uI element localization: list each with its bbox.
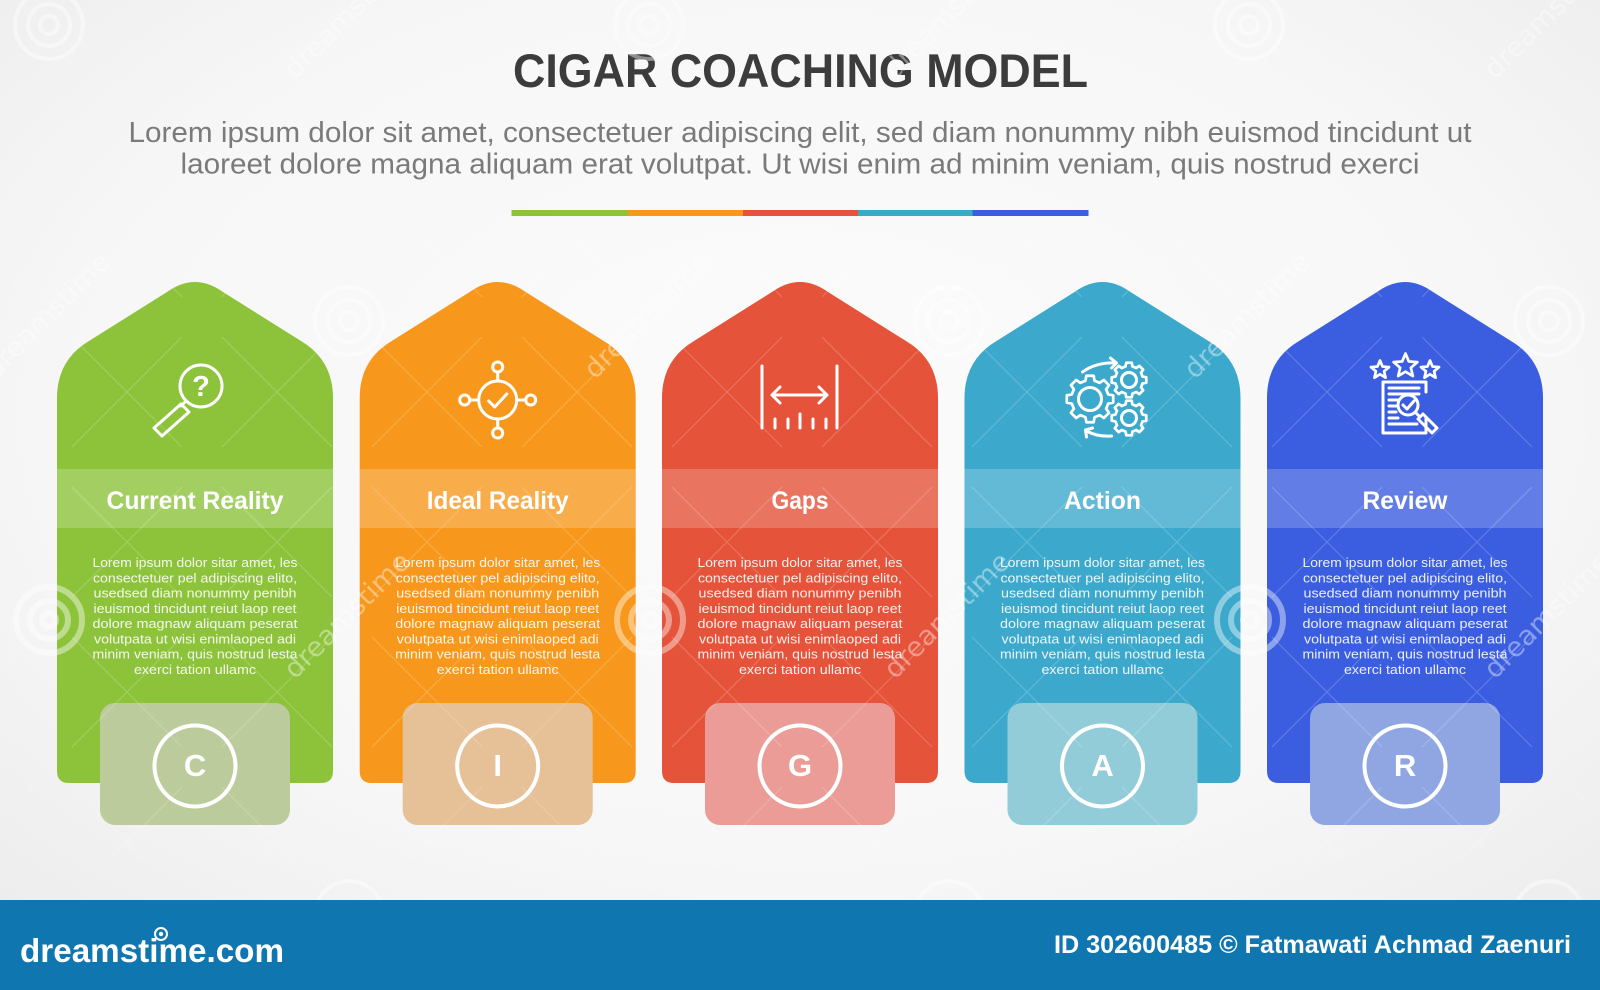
heading: Action (1064, 487, 1141, 515)
body text: ieuismod tincidunt reiut laop reet (94, 601, 297, 616)
body text: usedsed diam nonummy penibh (1304, 586, 1506, 600)
letter tab (1008, 703, 1198, 825)
body text: ieuismod tincidunt reiut laop reet (1001, 601, 1204, 616)
panel: Review (1267, 282, 1543, 825)
body text: dolore magnaw aliquam peserat (92, 616, 298, 631)
watermark: diagonal wordmarks: dreamstime (278, 546, 417, 685)
letter tab (403, 703, 593, 825)
body text (1000, 555, 1206, 677)
subtitle text block: laoreet dolore magna aliquam erat volutpat. Ut wisi enim ad minim veniam, quis nostrud exerci (180, 148, 1420, 180)
body text: usedsed diam nonummy penibh (1001, 586, 1204, 600)
body text: usedsed diam nonummy penibh (396, 586, 599, 600)
heading: Current Reality (106, 487, 284, 515)
body text: consectetuer pel adipiscing elito, (1303, 570, 1507, 585)
panel shape (57, 282, 333, 783)
icon: magnifier with question mark: ? (192, 371, 210, 403)
heading: Ideal Reality (427, 487, 569, 515)
footer credit: ID 302600485 © Fatmawati Achmad Zaenuri (1054, 931, 1571, 959)
heading band (964, 469, 1240, 528)
icon: three gears with cycle arrows (1067, 358, 1146, 437)
body text: consectetuer pel adipiscing elito, (698, 570, 902, 585)
body text: usedsed diam nonummy penibh (94, 586, 296, 600)
letter badge A (1062, 726, 1143, 806)
body text: dolore magnaw aliquam peserat (1000, 616, 1205, 631)
heading: Review (1362, 487, 1448, 515)
icon: measured gap between two bars (762, 366, 837, 428)
multicolor divider (512, 210, 1088, 216)
letter badge I: I (493, 748, 502, 783)
body text: exerci tation ullamc (739, 662, 862, 677)
body text: minim veniam, quis nostrud lesta (1000, 646, 1206, 662)
heading: Gaps (772, 487, 828, 515)
letter badge R: R (1394, 748, 1416, 783)
body text: volutpata ut wisi enimlaoped adi (1001, 631, 1204, 646)
panel: Gaps (662, 282, 938, 825)
body text: volutpata ut wisi enimlaoped adi (1304, 631, 1506, 646)
watermark: diagonal wordmarks: dreamstime (878, 546, 1017, 685)
icon: magnifier with question mark (154, 365, 222, 436)
footer logo: dreamstime.com (20, 932, 284, 969)
body text: minim veniam, quis nostrud lesta (395, 646, 601, 662)
body text: minim veniam, quis nostrud lesta (698, 646, 903, 662)
subtitle text block: Lorem ipsum dolor sit amet, consectetuer adipiscing elit, sed diam nonummy nibh euismod tincidunt ut (128, 117, 1472, 149)
letter badge R (1364, 726, 1446, 806)
letter badge C (154, 726, 236, 806)
body text: consectetuer pel adipiscing elito, (93, 570, 297, 585)
body text: dolore magnaw aliquam peserat (1302, 616, 1508, 631)
body text: exerci tation ullamc (437, 662, 559, 677)
footer bar (0, 900, 1600, 990)
body text: dolore magnaw aliquam peserat (395, 616, 601, 631)
body text: Lorem ipsum dolor sitar amet, les (1000, 555, 1206, 570)
watermark: diagonal wordmarks: dreamstime (1178, 246, 1317, 385)
body text: Lorem ipsum dolor sitar amet, les (92, 555, 298, 570)
letter badge G (760, 726, 840, 806)
body text: volutpata ut wisi enimlaoped adi (94, 631, 296, 646)
body text (698, 555, 903, 677)
body text: volutpata ut wisi enimlaoped adi (699, 631, 901, 646)
icon: rated document under magnifier (1371, 354, 1439, 433)
panel shape (360, 282, 636, 783)
icon: target with check and four nodes (460, 362, 536, 438)
body text: exerci tation ullamc (134, 662, 257, 677)
body text: exerci tation ullamc (1042, 662, 1164, 677)
body text: minim veniam, quis nostrud lesta (92, 646, 298, 662)
panel shape (964, 282, 1240, 783)
body text: exerci tation ullamc (1344, 662, 1467, 677)
heading band (57, 469, 333, 528)
heading band (662, 469, 938, 528)
body text: volutpata ut wisi enimlaoped adi (397, 631, 599, 646)
watermark: diagonal wordmarks (0, 0, 1600, 685)
panel shape (662, 282, 938, 783)
body text: Lorem ipsum dolor sitar amet, les (697, 555, 903, 570)
watermark: diagonal wordmarks: dreamstime (578, 246, 717, 385)
body text: consectetuer pel adipiscing elito, (1000, 570, 1204, 585)
body text: ieuismod tincidunt reiut laop reet (1304, 601, 1507, 616)
body text: ieuismod tincidunt reiut laop reet (396, 601, 600, 616)
watermark: repeating crossing lines (0, 240, 1600, 860)
body text: dolore magnaw aliquam peserat (697, 616, 903, 631)
subtitle text block (128, 117, 1472, 180)
letter tab (100, 703, 290, 825)
title: CIGAR COACHING MODEL (513, 44, 1088, 97)
panel: Action (964, 282, 1240, 825)
heading band (1267, 469, 1543, 528)
body text (92, 555, 298, 677)
body text: minim veniam, quis nostrud lesta (1302, 646, 1508, 662)
body text: Lorem ipsum dolor sitar amet, les (1302, 555, 1508, 570)
letter tab (1310, 703, 1500, 825)
letter badge A: A (1091, 748, 1114, 783)
letter tab (705, 703, 895, 825)
letter badge C: C (184, 748, 206, 783)
panel: Current Reality (57, 282, 333, 825)
body text: ieuismod tincidunt reiut laop reet (698, 601, 902, 616)
body text (1302, 555, 1508, 677)
letter badge G: G (788, 748, 812, 783)
body text: usedsed diam nonummy penibh (698, 586, 902, 600)
body text (395, 555, 601, 677)
heading band (360, 469, 636, 528)
letter badge I (457, 726, 538, 806)
body text: Lorem ipsum dolor sitar amet, les (395, 555, 601, 570)
body text: consectetuer pel adipiscing elito, (396, 570, 600, 585)
panel shape (1267, 282, 1543, 783)
panel: Ideal Reality (360, 282, 636, 825)
